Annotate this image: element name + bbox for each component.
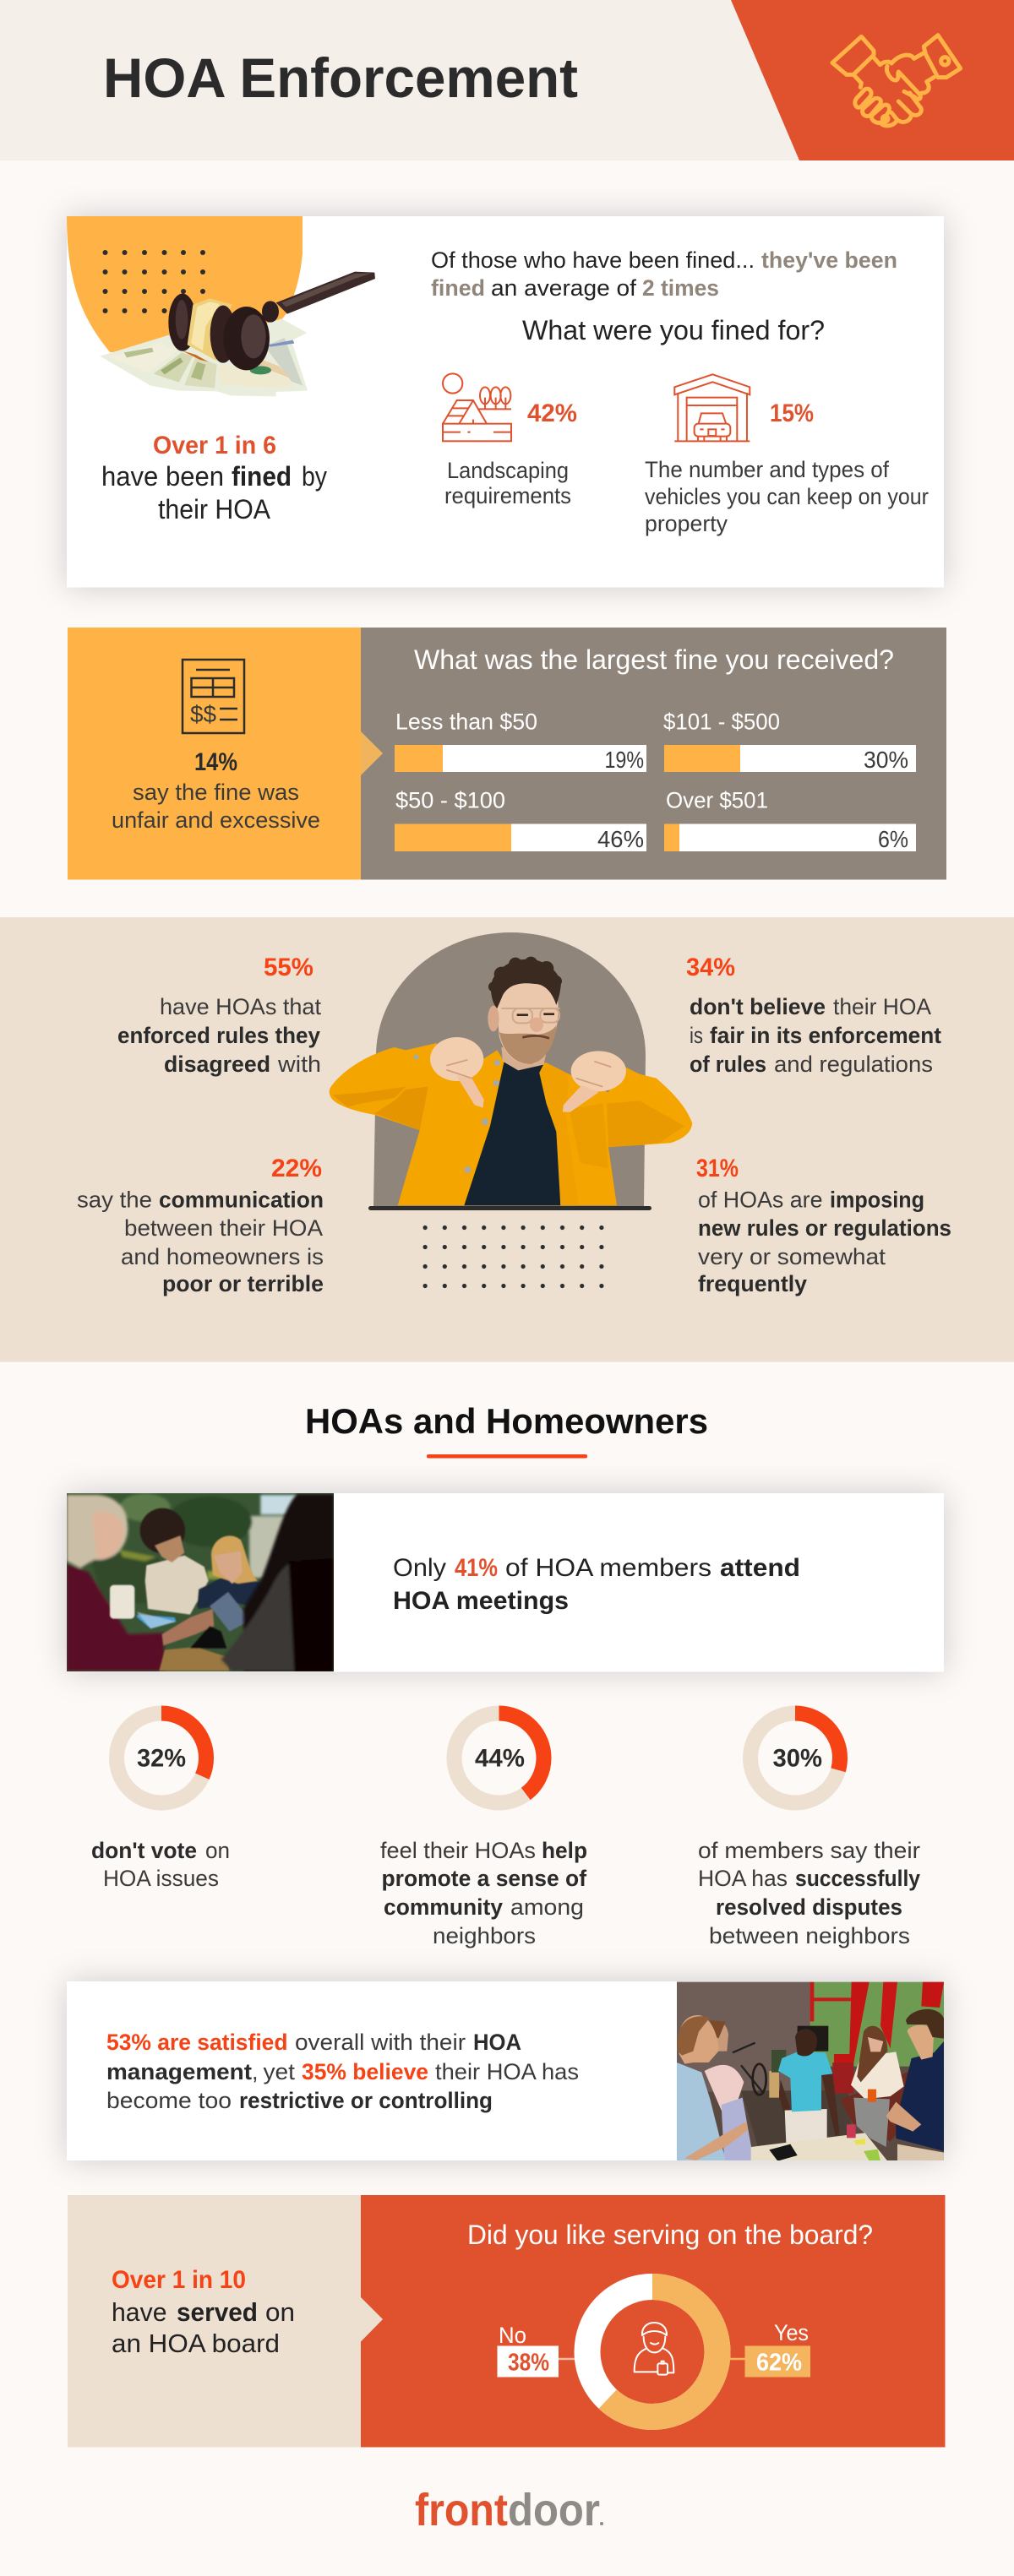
label: landscaping requirements: Landscaping — [447, 458, 569, 483]
text: don't vote: HOA issues — [103, 1866, 219, 1891]
stat: 15%: 15% — [770, 399, 814, 427]
stat: 34%: don't believe — [690, 994, 826, 1019]
stat: over 1 in 6: fined — [232, 461, 292, 492]
logo: frontdoor: front — [415, 2485, 508, 2535]
arrow — [361, 2297, 383, 2341]
text: average fines: they've been — [761, 247, 897, 273]
bar: over $501: 6% — [878, 826, 908, 852]
image: neighbors outdoors — [67, 1493, 334, 1672]
text: average fines: fined — [431, 275, 485, 301]
icon: handshake — [832, 35, 961, 126]
label: vehicles: vehicles you can keep on your — [645, 484, 929, 509]
text: sense of community: feel their HOAs — [380, 1838, 536, 1863]
heading: largest fine: What was the largest fine you received? — [414, 644, 894, 675]
image: man with thumbs down — [330, 957, 692, 1205]
text: meeting attendance: HOA meetings — [393, 1587, 569, 1615]
donut: 32% — [117, 1713, 206, 1802]
stat: over 1 in 10: on — [265, 2297, 295, 2327]
text: don't vote — [91, 1838, 230, 1891]
text: satisfaction: yet — [264, 2059, 296, 2084]
heading: did you like serving: Did you like serving on the board? — [467, 2220, 873, 2250]
icon: board member — [635, 2323, 673, 2375]
bar: $50-$100 — [395, 787, 646, 852]
stat: 34%: is — [690, 1023, 703, 1048]
icon: receipt: $$ — [190, 701, 216, 727]
donut: 32%: 32% — [137, 1745, 186, 1772]
stat: over 1 in 10 — [112, 2266, 295, 2358]
panel: largest fine — [68, 628, 946, 880]
label: no 38%: 38% — [508, 2350, 549, 2377]
stat: 34% — [686, 954, 941, 1077]
stat: over 1 in 6 — [101, 432, 327, 524]
icon: landscaping — [443, 373, 511, 441]
label: vehicles — [645, 457, 929, 536]
yellow blob — [67, 216, 303, 355]
icon: receipt — [183, 660, 244, 733]
label: no 38% — [497, 2323, 559, 2377]
text: satisfaction: become too — [106, 2088, 232, 2113]
stat: 55%: 55% — [264, 954, 313, 981]
text: average fines: 2 times — [642, 275, 719, 301]
bar: $50-$100: 46% — [597, 826, 644, 852]
stat: 31%: 31% — [696, 1155, 739, 1182]
donut: 30%: 30% — [772, 1745, 822, 1772]
stat: 31% — [696, 1155, 951, 1296]
stat: 55% — [117, 954, 321, 1077]
heading: what were you fined for: What were you fined for? — [522, 315, 825, 345]
stat: 31%: of HOAs are — [698, 1187, 823, 1213]
text: meeting attendance — [393, 1554, 800, 1615]
text: satisfaction — [106, 2030, 579, 2113]
text: don't vote: on — [205, 1838, 230, 1863]
text: meeting attendance: Only — [393, 1554, 446, 1582]
stat: 31%: frequently — [698, 1271, 807, 1296]
logo: frontdoor: door — [508, 2485, 600, 2535]
panel: meeting attendance — [67, 1493, 944, 1672]
text: resolved disputes: between neighbors — [709, 1923, 910, 1948]
stat: 14% — [112, 748, 320, 833]
label: landscaping requirements: requirements — [444, 483, 571, 508]
logo: frontdoor — [415, 2485, 603, 2535]
header band — [0, 0, 1014, 160]
stat: over 1 in 6: by — [302, 461, 327, 492]
text: sense of community: neighbors — [433, 1923, 536, 1948]
label: landscaping requirements — [444, 458, 571, 508]
text: average fines: Of those who have been fined... — [431, 247, 755, 273]
text: sense of community: among — [510, 1894, 584, 1920]
text: resolved disputes: HOA has — [698, 1866, 788, 1891]
label: vehicles: The number and types of — [645, 457, 889, 482]
donut: 30% — [750, 1713, 840, 1802]
stat: 34%: of rules — [690, 1052, 766, 1077]
text: satisfaction: their HOA has — [435, 2059, 579, 2084]
text: resolved disputes: successfully — [795, 1866, 920, 1891]
stat: 22%: and homeowners is — [121, 1244, 324, 1269]
stat: over 1 in 6: their HOA — [158, 494, 271, 524]
title: HOA Enforcement — [103, 46, 578, 109]
stat: 22%: communication — [159, 1187, 324, 1213]
stat: 22%: between their HOA — [124, 1215, 323, 1241]
bar: $101-$500: 30% — [864, 747, 908, 773]
bar: less than $50: 19% — [605, 747, 644, 773]
bar: less than $50 — [395, 709, 646, 773]
stat: over 1 in 6: Over 1 in 6 — [153, 432, 276, 459]
label: yes 62%: Yes — [774, 2320, 809, 2345]
stat: 42%: 42% — [527, 399, 577, 427]
donut: 44% — [455, 1713, 544, 1802]
stat: 55%: with — [277, 1052, 321, 1077]
heading: HOAs and Homeowners: HOAs and Homeowners — [305, 1401, 708, 1441]
bar: $101-$500: $101 - $500 — [663, 709, 780, 735]
text: satisfaction: HOA — [473, 2030, 521, 2055]
base line — [368, 1206, 651, 1210]
text: satisfaction: , — [252, 2059, 259, 2084]
text: resolved disputes — [698, 1838, 920, 1948]
bar: less than $50: Less than $50 — [395, 709, 537, 735]
dot grid — [103, 250, 205, 313]
bar: $101-$500 — [663, 709, 916, 773]
image: group around table — [677, 1982, 945, 2162]
stat: 55%: have HOAs that — [160, 994, 321, 1019]
text: average fines — [431, 247, 897, 301]
stat: 22%: poor or terrible — [162, 1271, 324, 1296]
stat: 34%: fair in its enforcement — [710, 1023, 941, 1048]
dot grid — [416, 1218, 612, 1296]
text: sense of community: help — [542, 1838, 587, 1863]
stat: 22%: say the — [77, 1187, 152, 1213]
text: satisfaction: management — [106, 2059, 252, 2084]
donut: board satisfaction — [559, 2287, 745, 2417]
text: sense of community: promote a sense of — [382, 1866, 587, 1891]
text: don't vote: don't vote — [91, 1838, 197, 1863]
text: sense of community: community — [384, 1894, 503, 1920]
stat: over 1 in 10: an HOA board — [112, 2329, 280, 2358]
label: yes 62%: 62% — [756, 2350, 802, 2377]
panel: fined card — [67, 216, 944, 588]
stat: 34%: and regulations — [774, 1052, 933, 1077]
text: meeting attendance: of HOA members — [505, 1554, 711, 1582]
stat: 14%: unfair and excessive — [112, 807, 320, 833]
stat: over 1 in 6: have been — [101, 461, 224, 492]
stat: 31%: new rules or regulations — [698, 1215, 951, 1241]
panel: opinions on enforcement — [0, 917, 1014, 1361]
panel: board service — [68, 2195, 945, 2448]
text: satisfaction: 35% believe — [302, 2059, 428, 2084]
stat: 22%: 22% — [271, 1155, 322, 1182]
stat: 55%: enforced rules they — [117, 1023, 320, 1048]
stat: 55%: disagreed — [164, 1052, 270, 1077]
icon: garage — [674, 374, 750, 441]
arrow — [361, 731, 383, 775]
stat: 34%: 34% — [686, 954, 735, 981]
bar: over $501 — [664, 787, 916, 852]
stat: 14%: say the fine was — [133, 780, 299, 805]
donut: 44%: 44% — [475, 1745, 525, 1772]
text: sense of community — [380, 1838, 587, 1948]
stat: 34%: their HOA — [833, 994, 931, 1019]
stat: 22% — [77, 1155, 324, 1296]
text: meeting attendance: attend — [720, 1554, 800, 1582]
text: average fines: an average of — [491, 275, 637, 301]
heading: HOAs and Homeowners — [305, 1401, 708, 1458]
stat: 14%: 14% — [194, 748, 237, 776]
stat: over 1 in 10: Over 1 in 10 — [112, 2266, 246, 2294]
text: meeting attendance: 41% — [455, 1554, 498, 1582]
stat: 31%: very or somewhat — [698, 1244, 886, 1269]
stat: over 1 in 10: served — [177, 2297, 258, 2327]
stat: 31%: imposing — [830, 1187, 924, 1213]
bar: over $501: Over $501 — [666, 787, 768, 812]
text: resolved disputes: of members say their — [698, 1838, 920, 1863]
text: satisfaction: 53% are satisfied — [106, 2030, 287, 2055]
panel: satisfaction — [67, 1981, 945, 2162]
text: satisfaction: restrictive or controlling — [239, 2088, 493, 2113]
label: no 38%: No — [499, 2323, 526, 2348]
arch backdrop — [373, 932, 646, 1206]
stat: over 1 in 10: have — [112, 2297, 167, 2327]
text: satisfaction: overall with their — [295, 2030, 466, 2055]
label: vehicles: property — [645, 511, 728, 536]
text: resolved disputes: resolved disputes — [716, 1894, 902, 1920]
label: yes 62% — [745, 2320, 810, 2377]
image: gavel on money — [100, 272, 375, 396]
bar: $50-$100: $50 - $100 — [395, 787, 505, 812]
